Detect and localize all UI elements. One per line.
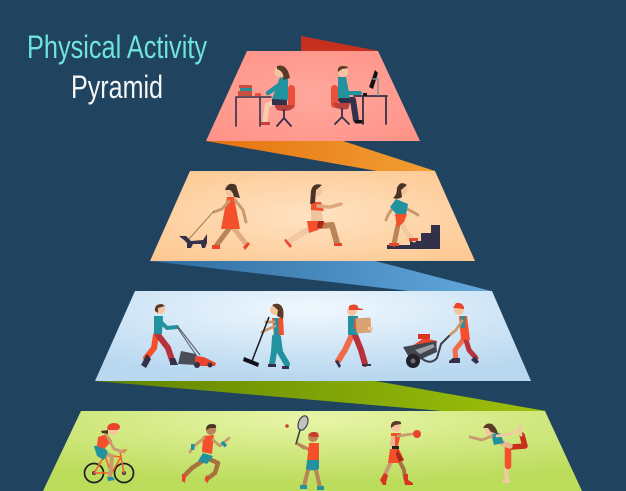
- figure: woman at desk: [236, 66, 295, 126]
- ribbon: orange: [206, 141, 435, 171]
- figure: woman walking a dog: [179, 184, 250, 250]
- figure: man at computer: [331, 66, 387, 124]
- ribbon: green: [95, 381, 546, 411]
- figure: man carrying box: [335, 304, 373, 368]
- ribbon: red top: [301, 36, 379, 51]
- figure: cyclist: [84, 423, 134, 482]
- figure: yoga pose: [470, 424, 525, 483]
- figure: man mowing: [141, 304, 216, 368]
- figure: woman climbing stairs: [386, 183, 440, 249]
- title: Pyramid: [71, 69, 163, 105]
- title: [27, 29, 207, 105]
- figure: woman sweeping: [243, 304, 289, 369]
- panel: vigorous activity tier: [43, 411, 582, 491]
- title: Physical Activity: [27, 29, 207, 65]
- panel: moderate activity tier: [95, 291, 531, 381]
- figure: woman lunging: [284, 184, 342, 248]
- figure: man with wheelbarrow: [403, 303, 479, 368]
- figure: runner: [182, 424, 229, 483]
- figure: tennis player: [285, 414, 324, 490]
- ribbon: blue: [150, 261, 491, 291]
- panel: sedentary tier: [206, 51, 420, 141]
- panel: light activity tier: [150, 171, 475, 261]
- figure: boxer: [380, 421, 421, 485]
